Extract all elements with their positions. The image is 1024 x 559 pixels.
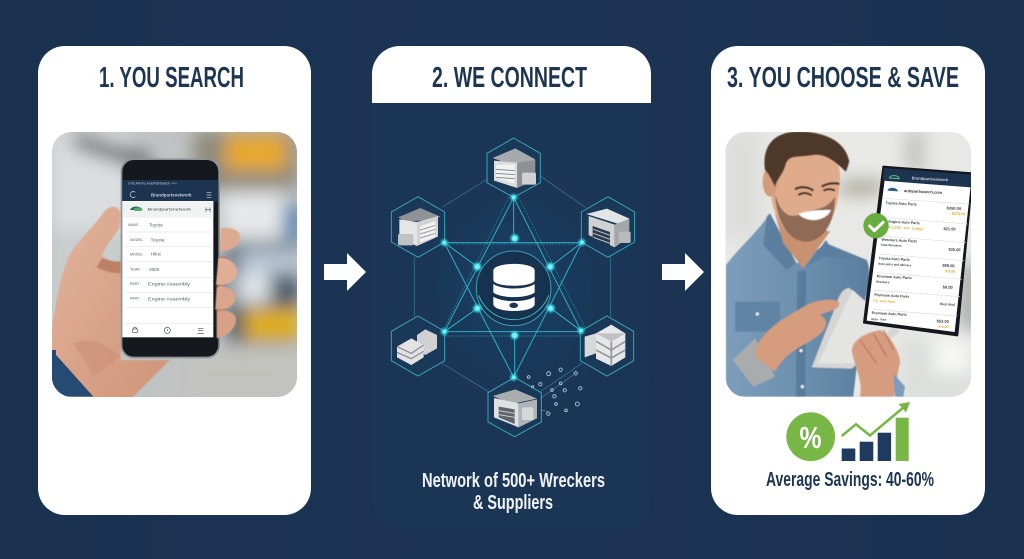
results tablet: $ 1,200 · 4.9 · 2 days [888, 225, 924, 231]
photo: hand holding phone [50, 130, 300, 400]
results tablet: autopartsearch.com [904, 188, 943, 195]
panel 1: you search: Engine Assembly [148, 282, 191, 288]
panel 1: you search: MODEL [130, 238, 143, 242]
icon: percent badge: % [800, 420, 822, 455]
face and neck [775, 213, 830, 268]
panel 1: you search: Engine Assembly [148, 296, 191, 302]
savings icons [766, 402, 934, 491]
centre hub [476, 251, 551, 326]
results tablet: 4.8 · Auto Parts [873, 299, 896, 304]
small tablet in hands [812, 288, 900, 369]
bright star lines [444, 197, 585, 377]
panel 1: you search: 9:41 AM Ins AutoPartSearch +++ [128, 181, 177, 185]
building: upper left [398, 208, 440, 246]
network diagram [391, 138, 635, 437]
results tablet: Brandpartsnetwork [912, 175, 949, 182]
hands [755, 300, 839, 372]
caption: savings: Average Savings: 40-60% [766, 469, 934, 491]
panel 1: you search: Brandpartsnetwork [148, 207, 191, 212]
arrow 1 [324, 253, 366, 291]
results tablet: $350.00 [947, 205, 962, 211]
sleeve [52, 355, 94, 397]
results tablet: Premium Auto Parts [877, 274, 912, 280]
results tablet: Toyota Auto Parts [879, 256, 910, 262]
results tablet: Premium Auto Parts [874, 293, 909, 299]
connection lines outer [414, 176, 611, 392]
caption: network [422, 470, 605, 514]
panel 1: you search: Toyota [151, 237, 165, 242]
panel 3: you choose and save [711, 46, 985, 515]
heading: step 1: 1. YOU SEARCH [99, 62, 244, 94]
results tablet [864, 167, 973, 335]
stacks: lower left [397, 329, 437, 365]
phone body [121, 158, 220, 358]
panel 1: you search: PART [130, 296, 140, 300]
panel 1: you search: MAKE [128, 223, 139, 227]
hair [764, 132, 849, 187]
results tablet: $9.00 [943, 284, 954, 290]
results tablet: Engine Auto Parts [888, 220, 920, 225]
data particles [527, 368, 582, 415]
building: upper right [586, 209, 631, 247]
icon: growth chart [842, 402, 910, 461]
panel 2: we connect [372, 46, 651, 529]
fingers [215, 228, 240, 338]
results tablet: Premium Auto Parts [872, 311, 907, 317]
check badge [863, 213, 889, 238]
hand back [50, 207, 170, 400]
hexagon frames [391, 138, 635, 437]
stacks: lower right [585, 325, 625, 366]
results tablet: $ 8.00 [945, 269, 955, 274]
building: bottom [493, 389, 537, 427]
heading: step 2: 2. WE CONNECT [432, 62, 587, 94]
caption: network: & Suppliers [473, 492, 553, 514]
results tablet: $ 9.00 [938, 325, 949, 329]
panel 1: you search: 3000 [149, 267, 160, 272]
panel 1: you search: Brandpartsnetwork [151, 193, 192, 198]
building: top [493, 148, 536, 188]
results tablet: Wreckers [876, 280, 890, 284]
results tablet: Auto parts and delivery [878, 262, 912, 267]
results tablet: Toyota Auto Parts [886, 201, 917, 207]
results tablet: $52.00 [937, 318, 950, 324]
panel 1: you search: MODEL [130, 252, 143, 256]
results tablet: $370.00 [952, 212, 965, 216]
results tablet: Auto Wreckers [881, 243, 902, 248]
icon: percent badge [786, 412, 835, 461]
results tablet: Best deal [940, 302, 955, 307]
caption: network: Network of 500+ Wreckers [422, 470, 605, 492]
results tablet: Wreckers Auto Parts [881, 238, 917, 244]
panel 1: you search: Hilux [151, 252, 162, 257]
shirt [726, 213, 869, 397]
results tablet: Auto · Part [871, 317, 886, 322]
panel 1: you search: PART [130, 282, 140, 286]
results tablet: $21.00 [943, 226, 956, 232]
glow nodes [441, 194, 585, 381]
results tablet: $89.00 [942, 263, 955, 268]
beard [775, 193, 835, 242]
panel 1: you search: Toyota [149, 222, 163, 227]
arrow 2 [662, 253, 704, 291]
results tablet: $35.00 [948, 247, 961, 252]
photo: man with tablet [720, 130, 980, 400]
panel 1: you search: YEAR [130, 268, 140, 272]
panel 1: you search [38, 46, 311, 515]
man [726, 132, 905, 397]
